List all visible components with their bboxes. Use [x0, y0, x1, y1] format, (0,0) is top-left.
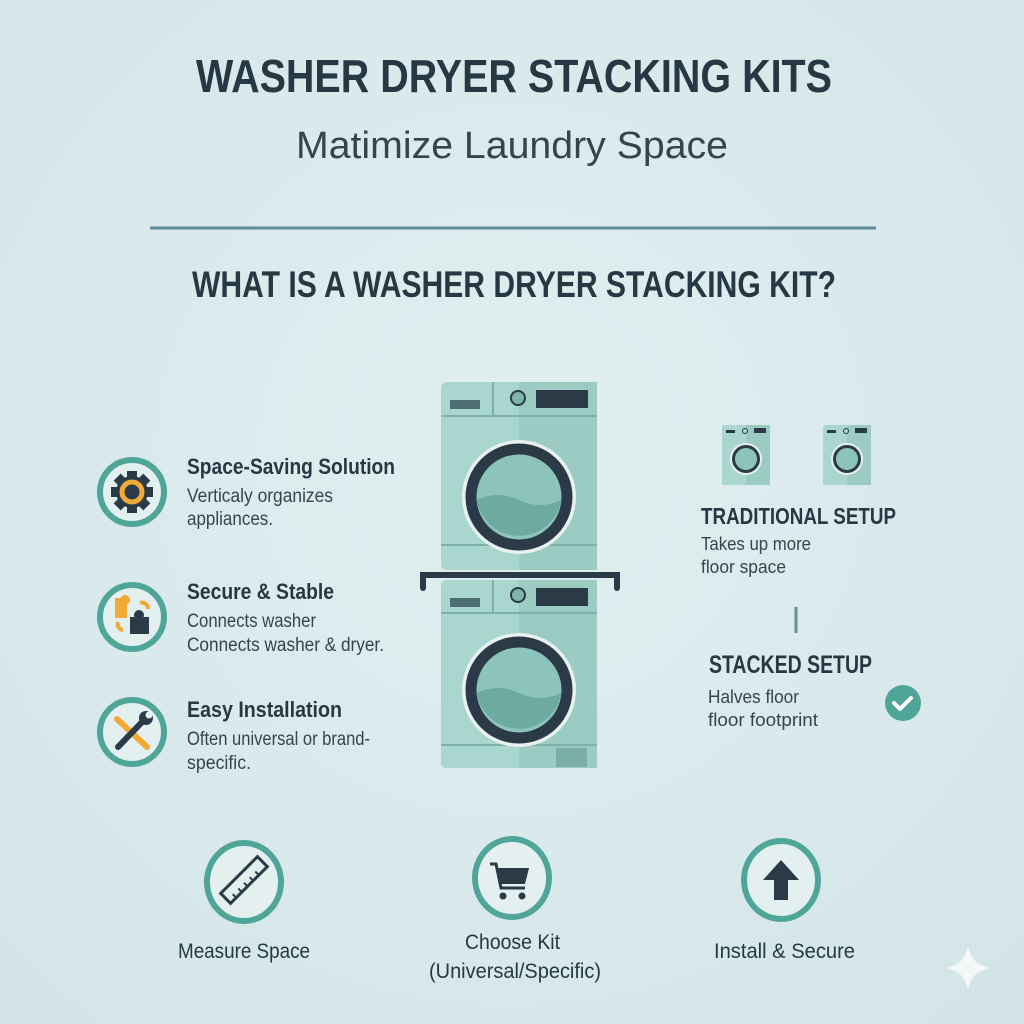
feature: secure: Secure & Stable — [187, 579, 334, 604]
traditional setup — [701, 425, 896, 577]
feature: installation: specific. — [187, 753, 251, 774]
icon: puzzle — [100, 585, 164, 649]
feature: secure: Connects washer — [187, 611, 317, 632]
step: choose kit: (Universal/Specific) — [429, 960, 601, 983]
feature: space-saving: Space-Saving Solution — [187, 454, 395, 479]
stacked washer and dryer — [423, 382, 617, 768]
step: measure: Measure Space — [178, 940, 310, 963]
sparkle mark — [946, 946, 990, 990]
icon: gear — [100, 460, 164, 524]
stacked setup: Halves floor — [708, 687, 799, 707]
section heading: WHAT IS A WASHER DRYER STACKING KIT? — [192, 264, 836, 305]
step: choose kit: Choose Kit — [465, 931, 560, 954]
icon: up arrow — [744, 841, 818, 919]
icon: ruler — [207, 843, 281, 921]
subtitle: Matimize Laundry Space — [296, 125, 728, 167]
traditional setup: TRADITIONAL SETUP — [701, 503, 896, 529]
step: install — [714, 841, 855, 963]
feature: installation — [100, 697, 370, 774]
step: choose kit — [429, 839, 601, 983]
stacking kit bracket — [423, 575, 617, 588]
icon: check — [885, 685, 921, 721]
feature: secure — [100, 579, 384, 656]
washer (bottom) — [441, 580, 597, 768]
feature: secure: Connects washer & dryer. — [187, 635, 384, 656]
feature: space-saving — [100, 454, 395, 530]
step: measure — [178, 843, 310, 963]
feature: installation: Easy Installation — [187, 697, 342, 722]
icon: wrench — [100, 700, 164, 764]
icon: cart — [475, 839, 549, 917]
traditional setup: Takes up more — [701, 534, 811, 554]
stacked setup: STACKED SETUP — [709, 651, 872, 679]
stacked setup — [708, 651, 921, 730]
icon: two small machines — [722, 425, 871, 485]
title: WASHER DRYER STACKING KITS — [196, 50, 832, 102]
feature: space-saving: appliances. — [187, 509, 273, 530]
feature: space-saving: Verticaly organizes — [187, 486, 333, 507]
step: install: Install & Secure — [714, 940, 855, 963]
stacked setup: floor footprint — [708, 710, 818, 730]
dryer (top) — [441, 382, 597, 570]
traditional setup: floor space — [701, 557, 786, 577]
feature: installation: Often universal or brand- — [187, 729, 370, 750]
